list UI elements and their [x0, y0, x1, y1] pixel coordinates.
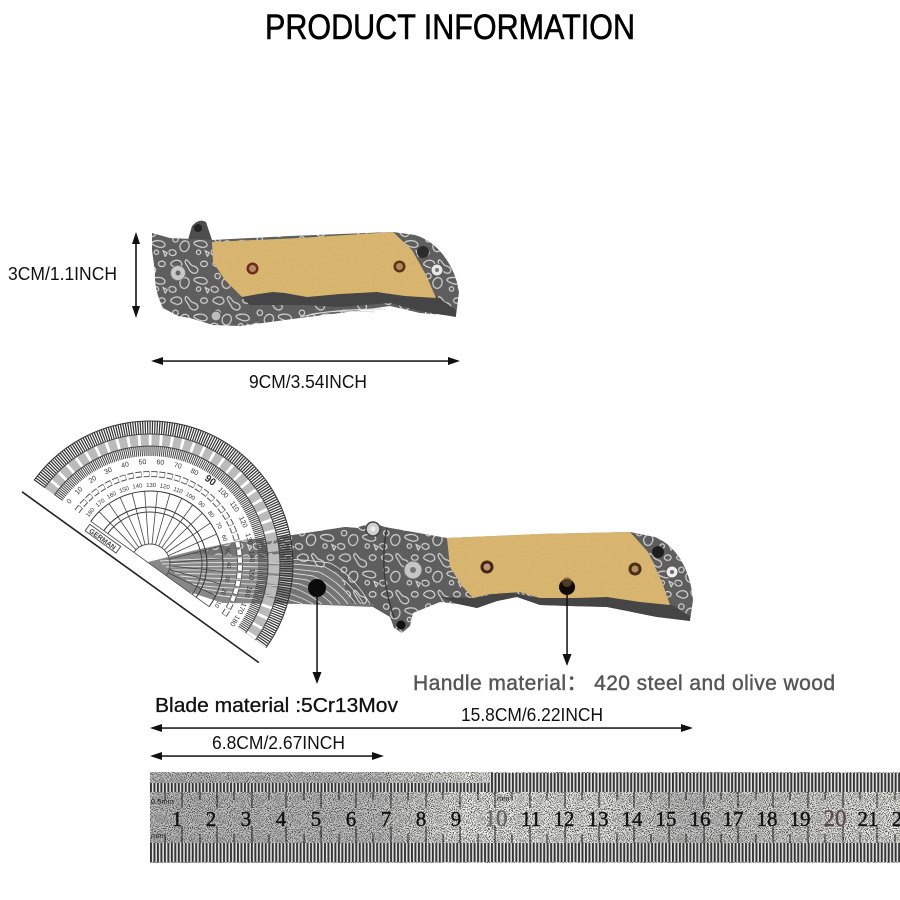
protractor inner degree numbers: 90 — [196, 500, 206, 510]
protractor — [22, 363, 352, 663]
handle bolts — [366, 522, 678, 630]
blade — [148, 527, 385, 607]
protractor scale bands — [34, 364, 350, 648]
ruler numbers: 19 — [790, 807, 810, 831]
protractor inner degree numbers: 40 — [225, 562, 231, 569]
callout: blade material pointer — [308, 579, 326, 684]
steel ruler — [150, 772, 900, 863]
protractor inner degree numbers — [85, 451, 263, 610]
label: closed height: 3CM/1.1INCH — [8, 264, 117, 284]
ruler unit marks — [151, 794, 510, 840]
top knife wood pins — [246, 260, 406, 274]
ruler numbers: 2 — [206, 807, 216, 831]
arrow: overall length — [150, 724, 693, 732]
protractor outer degree numbers: 30 — [103, 467, 113, 476]
ruler unit marks: 0.5mm — [151, 797, 174, 806]
ruler numbers: 16 — [690, 807, 710, 831]
protractor outer degree numbers: 10 — [74, 486, 85, 496]
protractor radial lines — [91, 462, 252, 607]
protractor outer degree numbers: 80 — [189, 468, 199, 478]
label: overall length: 15.8CM/6.22INCH — [461, 705, 603, 725]
ruler numbers: 6 — [346, 807, 356, 831]
ruler numbers: 8 — [416, 807, 426, 831]
protractor inner degree numbers: 140 — [132, 483, 144, 491]
ruler numbers: 5 — [311, 807, 321, 831]
protractor outer degree numbers: 100 — [216, 487, 229, 500]
ruler numbers: 11 — [521, 807, 541, 831]
blade grain lines — [160, 558, 370, 604]
protractor inner degree numbers: 160 — [106, 491, 118, 501]
blade upper damascus — [190, 527, 390, 605]
top knife blade grain — [300, 309, 385, 317]
small closed knife — [152, 221, 459, 326]
callout: handle material pointer — [559, 577, 575, 666]
ruler numbers: 4 — [276, 807, 287, 831]
large open knife — [148, 522, 693, 633]
protractor outer degree numbers: 40 — [120, 461, 130, 470]
protractor outer degree numbers: 110 — [228, 500, 240, 514]
ruler numbers: 1 — [172, 807, 182, 831]
protractor outer degree numbers: 0 — [66, 498, 74, 505]
protractor inner degree numbers: 30 — [223, 575, 230, 583]
handle steel — [358, 523, 693, 633]
label: blade length: 6.8CM/2.67INCH — [212, 733, 345, 753]
ruler numbers: 7 — [381, 807, 391, 831]
protractor outer degree numbers: 130 — [244, 533, 253, 546]
protractor inner degree numbers: 70 — [214, 522, 223, 531]
protractor inner degree numbers: 150 — [119, 486, 131, 495]
protractor outer degree numbers: 150 — [247, 568, 255, 581]
protractor outer degree numbers: 180 — [228, 614, 241, 627]
protractor inner degree numbers: 80 — [206, 510, 215, 520]
ruler numbers — [172, 806, 900, 831]
ruler numbers: 9 — [451, 807, 461, 831]
top knife bolts — [170, 224, 443, 321]
bolster edge line — [384, 528, 394, 618]
protractor translucent face — [34, 364, 350, 648]
protractor inner degree numbers: 180 — [85, 507, 97, 519]
protractor inner degree numbers: 170 — [95, 498, 107, 509]
ruler numbers: 21 — [858, 807, 878, 831]
handle lower dark edge — [440, 592, 690, 621]
ruler numbers: 18 — [756, 807, 778, 831]
arrow: height of closed knife — [132, 232, 140, 318]
protractor outer degree numbers: 70 — [173, 462, 182, 471]
label: blade material: Blade material :5Cr13Mov — [155, 695, 398, 717]
label: closed width: 9CM/3.54INCH — [249, 372, 367, 392]
ruler bottom stripes — [150, 843, 900, 862]
protractor straight base: GERMAN — [87, 528, 117, 552]
arrow: blade length — [150, 752, 384, 760]
ruler numbers: 3 — [241, 807, 251, 831]
ruler speckled body — [150, 772, 900, 863]
protractor outer degree numbers: 160 — [243, 585, 253, 598]
ruler centimetre ticks — [165, 792, 895, 843]
protractor inner degree numbers: 120 — [159, 483, 171, 491]
icon: top knife lanyard tab — [188, 221, 212, 240]
arrow: width of closed knife — [151, 357, 460, 365]
top knife lower dark edge — [240, 291, 456, 317]
title: PRODUCT INFORMATION — [265, 8, 635, 47]
ruler numbers: 13 — [588, 807, 608, 831]
protractor outer degree numbers: 60 — [156, 459, 165, 467]
handle wood scale — [447, 532, 670, 605]
label: handle material: Handle material： 420 steel and olive wood — [413, 672, 835, 695]
ruler numbers: 17 — [722, 807, 744, 831]
ruler numbers: 20 — [824, 806, 846, 831]
top knife steel body — [152, 232, 459, 326]
protractor outer degree numbers: 20 — [88, 475, 98, 485]
ruler top stripes — [150, 773, 900, 792]
ruler unit marks: mm — [151, 831, 164, 840]
protractor outer degree numbers: 90 — [202, 473, 218, 489]
handle wood pins — [480, 560, 642, 576]
protractor inner degree numbers: 130 — [146, 483, 157, 489]
protractor inner degree numbers: 60 — [220, 534, 228, 543]
protractor inner degree numbers: 50 — [224, 548, 231, 556]
protractor inner degree numbers: 20 — [219, 588, 227, 596]
protractor inner degree numbers: 110 — [172, 487, 184, 496]
ruler numbers: 15 — [656, 807, 676, 831]
ruler numbers: 10 — [484, 806, 508, 831]
protractor outer degree numbers — [63, 415, 298, 628]
protractor outer degree numbers: 120 — [237, 516, 248, 529]
ruler unit marks: mm — [497, 794, 510, 803]
protractor outer degree numbers: 140 — [247, 550, 255, 563]
top knife wood scale — [212, 232, 436, 298]
protractor outer degree numbers: 50 — [138, 459, 147, 467]
ruler numbers: 12 — [554, 807, 574, 831]
protractor inner degree numbers: 10 — [212, 600, 221, 609]
protractor straight base — [22, 479, 268, 663]
ruler numbers: 14 — [622, 807, 643, 831]
protractor inner degree numbers: 100 — [184, 492, 196, 502]
protractor outer degree numbers: 170 — [236, 601, 247, 615]
